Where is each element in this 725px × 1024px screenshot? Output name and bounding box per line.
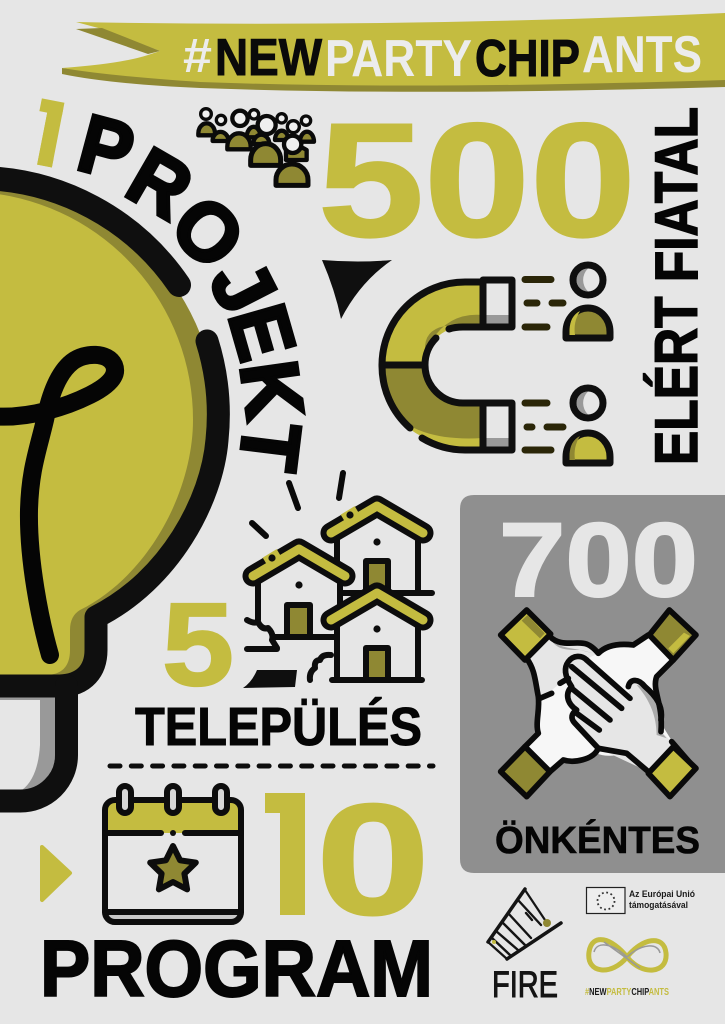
label: ÖNKÉNTES: ÖNKÉNTES bbox=[495, 818, 700, 862]
heading: 1 PROJEKT bbox=[37, 98, 306, 474]
icon: light bulb bbox=[0, 178, 218, 801]
icon: magnet attracting people bbox=[382, 265, 610, 463]
banner: ribbon with hashtag: # bbox=[183, 30, 212, 83]
number: 10: 1 bbox=[238, 762, 333, 952]
label: TELEPÜLÉS: TELEPÜLÉS bbox=[135, 697, 422, 757]
label: PROGRAM: PROGRAM bbox=[40, 924, 433, 1013]
logo: FIRE bbox=[488, 889, 561, 1005]
icon: three houses bbox=[243, 506, 432, 688]
arrow: olive triangle bbox=[42, 847, 70, 900]
banner: ribbon with hashtag: NEW bbox=[215, 29, 323, 87]
calendar rings bbox=[119, 786, 227, 813]
bulb base socket bbox=[0, 697, 55, 790]
ground lines bbox=[247, 620, 331, 680]
word: PROJEKT: K bbox=[222, 355, 320, 425]
word: PROJEKT: O bbox=[153, 178, 262, 287]
logo: EU flag and support text: Az Európai Unió bbox=[629, 889, 695, 899]
house left bbox=[253, 549, 345, 640]
cuffs bbox=[501, 610, 696, 797]
banner: ribbon with hashtag bbox=[62, 13, 725, 92]
logo: infinity mark with hashtag: #NEWPARTYCHIPANTS bbox=[585, 986, 669, 998]
word: PROJEKT bbox=[69, 97, 320, 476]
icon: calendar with star bbox=[105, 786, 241, 922]
word: PROJEKT: R bbox=[113, 130, 207, 237]
number: 10 bbox=[265, 793, 423, 916]
word: PROJEKT: J bbox=[192, 246, 293, 327]
magnet body bbox=[382, 280, 512, 450]
house back right bbox=[331, 506, 432, 593]
logo: EU flag and support text bbox=[586, 888, 695, 914]
banner: ribbon with hashtag: ANTS bbox=[582, 26, 702, 84]
panel: volunteers bbox=[460, 495, 725, 873]
number: 1: 1 bbox=[11, 80, 80, 190]
person top bbox=[566, 265, 610, 338]
house front bbox=[331, 593, 423, 680]
icon: radiating lines above houses bbox=[252, 473, 343, 536]
logo: FIRE: FIRE bbox=[492, 964, 558, 1005]
person bottom bbox=[566, 388, 610, 463]
number: 10: 0 bbox=[316, 772, 430, 948]
banner: ribbon with hashtag: CHIP bbox=[475, 30, 580, 88]
motion dashes bbox=[525, 280, 563, 450]
number: 1 bbox=[37, 98, 64, 168]
logo: EU flag and support text: támogatásával bbox=[629, 900, 688, 910]
banner: ribbon with hashtag: PARTY bbox=[325, 30, 472, 88]
logo: infinity mark with hashtag bbox=[585, 940, 669, 998]
number: 500: 500 bbox=[318, 90, 636, 271]
number: 5: 5 bbox=[162, 579, 234, 711]
icon: crowd of people bbox=[198, 109, 314, 185]
star bbox=[150, 846, 196, 889]
word: PROJEKT: P bbox=[69, 97, 143, 199]
arrow: black triangle bbox=[322, 260, 392, 319]
word: PROJEKT: T bbox=[222, 417, 318, 476]
word: PROJEKT: E bbox=[211, 295, 313, 370]
bulb filament bbox=[0, 355, 115, 655]
label: ELÉRT FIATAL: ELÉRT FIATAL bbox=[643, 107, 710, 465]
number: 700: 700 bbox=[499, 502, 698, 619]
icon: stacked hands bbox=[501, 610, 696, 797]
